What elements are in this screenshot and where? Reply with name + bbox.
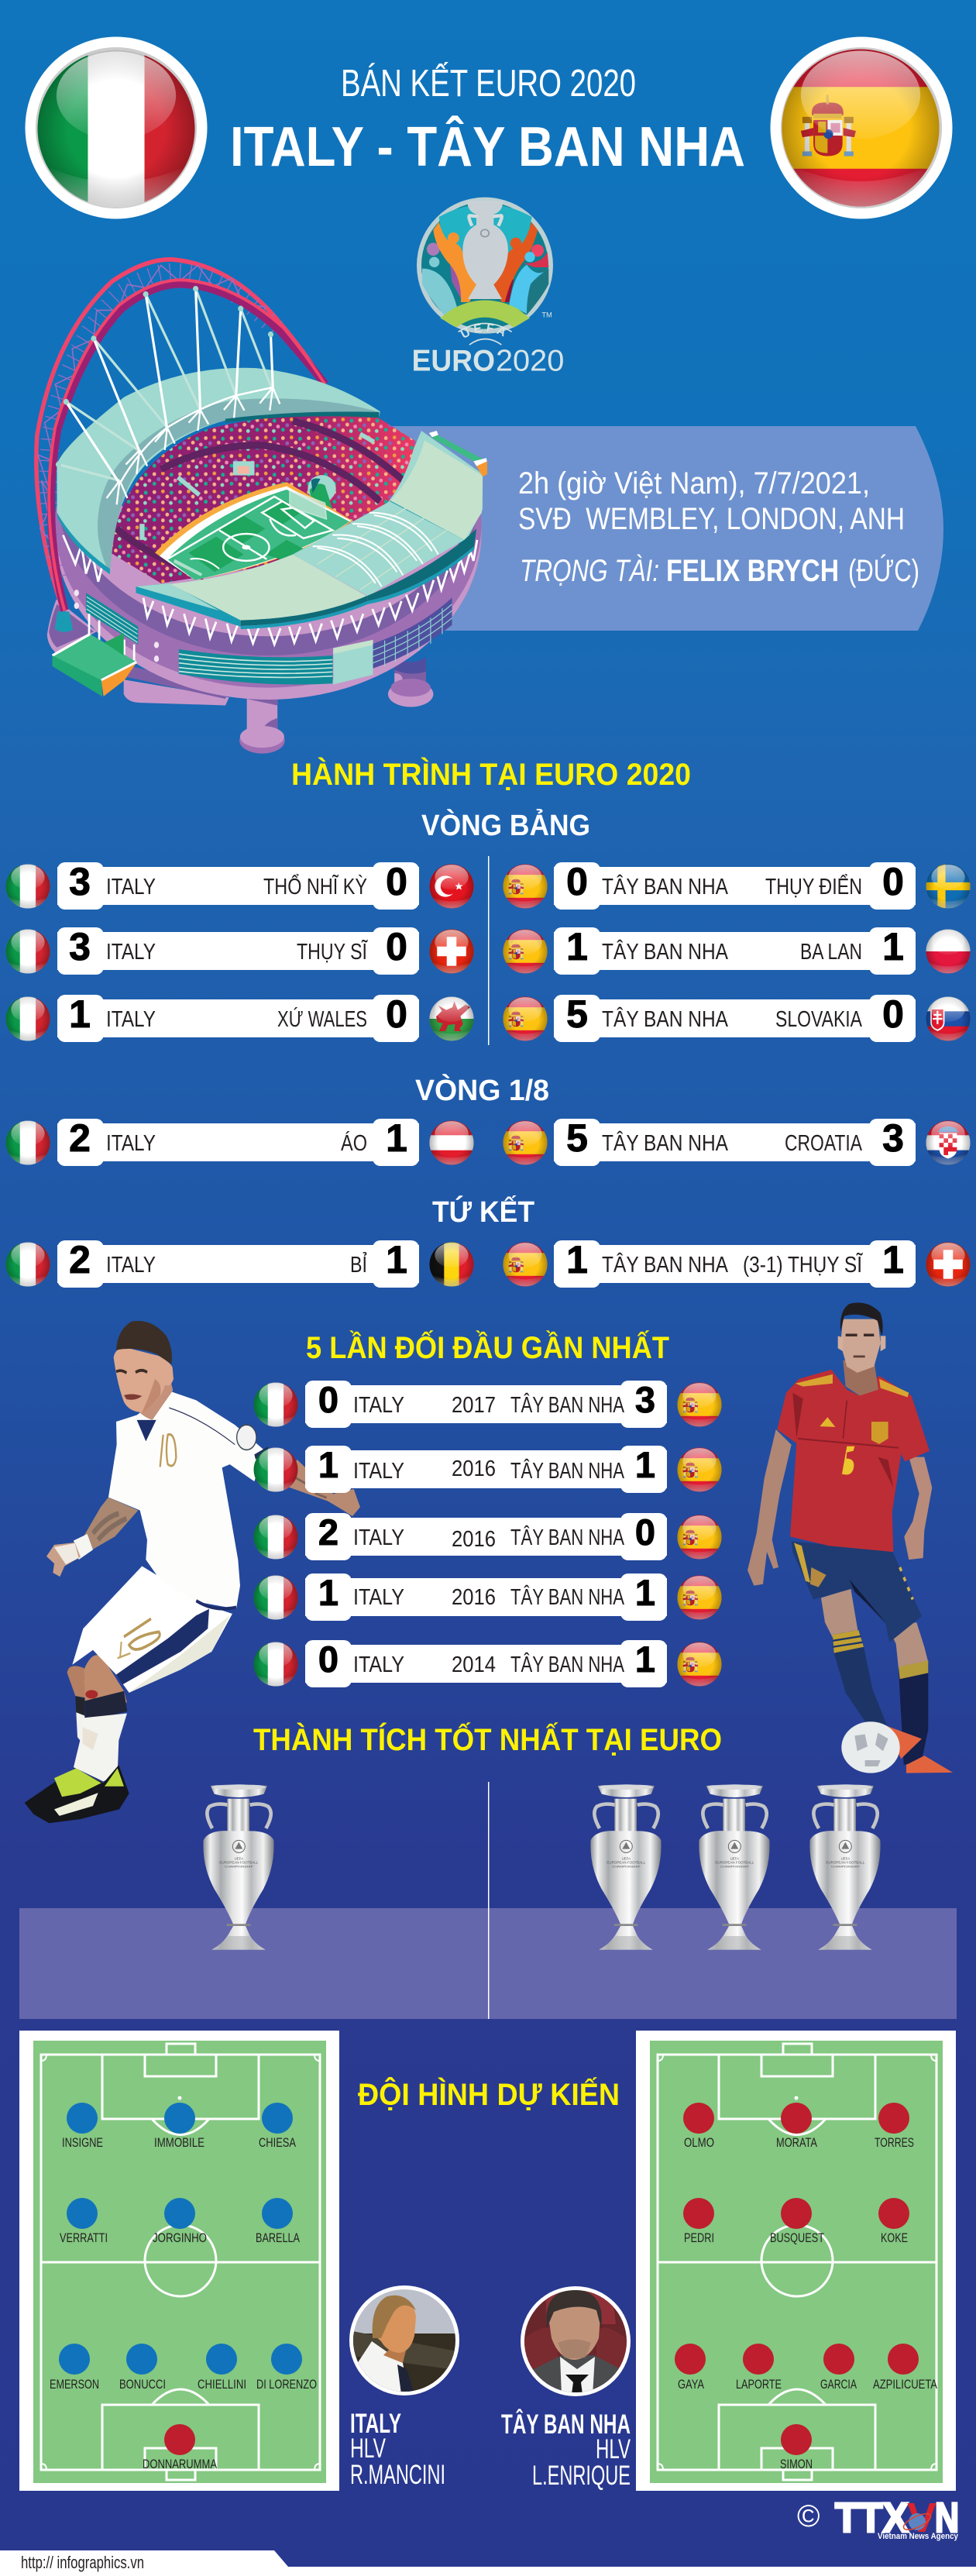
match time: 2h (giờ Việt Nam), 7/7/2021, [518, 466, 870, 500]
lineup pitch: Italy: EMERSON [50, 2377, 99, 2392]
match: Spain 1-1 Switzerland (3-1) [503, 1238, 970, 1288]
lineup pitch: Spain: TORRES [875, 2135, 914, 2150]
lineup pitch: Italy: DI LORENZO [256, 2377, 317, 2392]
match: Spain 5-3 Croatia: CROATIA [785, 1131, 863, 1156]
match: Italy 3-0 Turkey: 0 [386, 860, 407, 903]
match: Italy 2-1 Austria: ÁO [341, 1130, 367, 1156]
lineup pitch: Italy: CHIELLINI [198, 2377, 246, 2392]
match: Spain 5-0 Slovakia: 5 [566, 992, 588, 1036]
match: Italy 3-0 Switzerland: THỤY SĨ [297, 938, 369, 965]
match: Spain 5-0 Slovakia: SLOVAKIA [775, 1007, 863, 1032]
coach caption: Spain [501, 2409, 631, 2491]
heading: journey: HÀNH TRÌNH TẠI EURO 2020 [291, 757, 691, 792]
match: Spain 1-1 Switzerland (3-1): 1 [882, 1238, 904, 1281]
logo: TTXVN: N [935, 2495, 959, 2541]
match: Italy 3-0 Switzerland: 0 [386, 925, 407, 968]
main title: ITALY - TÂY BAN NHA [230, 115, 745, 178]
match: Italy 1-0 Wales: 0 [386, 992, 407, 1036]
heading: round of 16: VÒNG 1/8 [415, 1073, 549, 1107]
match: Italy 3-0 Turkey: ITALY [106, 875, 156, 899]
match: Italy 3-0 Turkey: 3 [69, 860, 91, 903]
match: Italy 3-0 Turkey [6, 860, 474, 910]
lineup pitch: Italy: INSIGNE [62, 2135, 103, 2150]
info pill [386, 426, 943, 631]
stadium illustration [36, 260, 487, 754]
match: Spain 0-0 Sweden: TÂY BAN NHA [602, 874, 729, 899]
lineup pitch: Italy: BARELLA [256, 2230, 300, 2245]
match: Italy 2-1 Belgium [6, 1238, 474, 1288]
match: Spain 1-1 Poland: BA LAN [800, 940, 862, 965]
referee: (ĐỨC) [848, 553, 919, 588]
lineup pitch: Italy: CHIESA [259, 2135, 296, 2150]
meeting 2014: 0 [318, 1639, 339, 1680]
match: Italy 3-0 Switzerland: ITALY [106, 940, 156, 965]
meeting 2017 [254, 1379, 722, 1428]
meeting 2017: 2017 [452, 1393, 496, 1418]
meeting 2014 [254, 1639, 722, 1687]
lineup pitch: Spain: BUSQUEST [770, 2230, 824, 2245]
match: Spain 5-3 Croatia [503, 1116, 970, 1166]
coach caption: Italy [350, 2409, 445, 2490]
heading: best Euro achievement: THÀNH TÍCH TỐT NHẤT TẠI EURO [253, 1721, 722, 1757]
referee: TRỌNG TÀI: [520, 553, 659, 588]
lineup pitch: Spain: GAYA [678, 2377, 705, 2392]
lineup pitch: Italy: JORGINHO [153, 2230, 207, 2245]
logo: UEFA Euro 2020: TM [541, 311, 552, 318]
lineup pitch: Spain: SIMON [780, 2457, 813, 2471]
match: Italy 2-1 Austria [6, 1116, 474, 1166]
match: Italy 1-0 Wales [6, 992, 474, 1042]
coach caption: Spain: TÂY BAN NHA [501, 2409, 631, 2440]
lineup pitch: Spain: GARCIA [820, 2377, 857, 2392]
coach photo: Mancini [349, 2285, 461, 2398]
match: Spain 1-1 Poland: 1 [566, 925, 588, 968]
match: Italy 1-0 Wales: 1 [69, 992, 91, 1036]
copyright mark: © [797, 2499, 820, 2533]
meeting 2016 first: ITALY [353, 1459, 404, 1484]
meeting 2014: 2014 [452, 1653, 496, 1677]
meeting 2016 third: 1 [635, 1572, 655, 1613]
lineup pitch: Spain: KOKE [881, 2230, 908, 2245]
match: Spain 1-1 Poland: TÂY BAN NHA [602, 939, 729, 965]
match: Italy 3-0 Switzerland [6, 925, 474, 975]
meeting 2017: ITALY [353, 1393, 404, 1418]
meeting 2016 second [254, 1512, 722, 1560]
meeting 2016 second: 2 [318, 1512, 339, 1553]
meeting 2016 first [254, 1444, 722, 1493]
lineup pitch: Spain: OLMO [684, 2135, 714, 2150]
heading: quarter-finals: TỨ KẾT [432, 1195, 534, 1229]
player: Spain no. 5 in red kit [747, 1302, 953, 1773]
logo: UEFA Euro 2020 [412, 197, 564, 378]
logo: TTXVN: TTX [835, 2495, 909, 2541]
logo: UEFA Euro 2020: UEFA [460, 324, 504, 338]
match: Spain 5-3 Croatia: TÂY BAN NHA [602, 1130, 729, 1156]
meeting 2016 first: 1 [318, 1444, 339, 1485]
meeting 2016 third: TÂY BAN NHA [510, 1584, 624, 1610]
heading: group stage: VÒNG BẢNG [421, 808, 590, 842]
heading: expected lineups: ĐỘI HÌNH DỰ KIẾN [358, 2076, 620, 2112]
meeting 2016 third: ITALY [353, 1585, 404, 1610]
footer strip with URL: http:// infographics.vn [21, 2553, 144, 2572]
match: Spain 1-1 Switzerland (3-1): 1 [566, 1238, 588, 1281]
match: Italy 2-1 Austria: 1 [386, 1116, 407, 1160]
match: Spain 1-1 Poland: 1 [882, 925, 904, 968]
lineup pitch: Italy: VERRATTI [60, 2230, 108, 2245]
meeting 2016 first: TÂY BAN NHA [510, 1458, 624, 1484]
match: Italy 2-1 Austria: 2 [69, 1116, 91, 1160]
match: Spain 0-0 Sweden [503, 860, 970, 910]
match: Italy 2-1 Belgium: BỈ [350, 1251, 367, 1278]
flag: Spain large [770, 37, 953, 218]
match: Spain 5-3 Croatia: 3 [882, 1116, 904, 1160]
meeting 2016 third [254, 1572, 722, 1621]
match: Italy 2-1 Belgium: ITALY [106, 1253, 156, 1278]
meeting 2017: 0 [318, 1379, 339, 1420]
meeting 2016 third: 1 [318, 1572, 339, 1613]
meeting 2016 third: 2016 [452, 1585, 496, 1610]
lineup pitch: Italy: DONNARUMMA [143, 2457, 218, 2471]
logo: TTXVN: V [907, 2495, 936, 2541]
match: Spain 0-0 Sweden: 0 [566, 860, 588, 903]
trophy shelf panel [19, 1908, 957, 2019]
meeting 2016 first: 1 [635, 1444, 655, 1485]
logo: UEFA Euro 2020: 2020 [496, 344, 564, 378]
lineup pitch: Spain: PEDRI [684, 2230, 714, 2245]
meeting 2017: TÂY BAN NHA [510, 1392, 624, 1418]
match: Italy 3-0 Switzerland: 3 [69, 925, 91, 968]
match: Italy 2-1 Belgium: 1 [386, 1238, 407, 1281]
lineup pitch: Italy: IMMOBILE [154, 2135, 204, 2150]
match: Spain 1-1 Switzerland (3-1): TÂY BAN NHA [602, 1252, 729, 1278]
meeting 2014: TÂY BAN NHA [510, 1652, 624, 1677]
coach caption: Spain: L.ENRIQUE [532, 2461, 631, 2491]
coach caption: Italy: HLV [350, 2433, 386, 2464]
match: Spain 0-0 Sweden: THỤY ĐIỂN [765, 873, 862, 899]
meeting 2016 second: TÂY BAN NHA [510, 1525, 624, 1550]
match: Italy 2-1 Austria: ITALY [106, 1131, 156, 1156]
match: Italy 1-0 Wales: ITALY [106, 1007, 156, 1032]
match: Italy 1-0 Wales: XỨ WALES [277, 1006, 367, 1032]
flag: Italy large [25, 37, 208, 218]
referee [520, 553, 919, 588]
group stage divider [488, 856, 490, 1045]
logo: TTXVN: Vietnam News Agency [878, 2532, 959, 2541]
heading: last 5 meetings: 5 LẦN ĐỐI ĐẦU GẦN NHẤT [306, 1329, 669, 1365]
referee: FELIX BRYCH [666, 554, 839, 588]
coach caption: Italy: R.MANCINI [350, 2460, 445, 2490]
match: Spain 0-0 Sweden: 0 [882, 860, 904, 903]
subtitle: BÁN KẾT EURO 2020 [341, 63, 636, 105]
trophy: Italy [203, 1784, 274, 1950]
match: Spain 5-0 Slovakia: TÂY BAN NHA [602, 1006, 729, 1032]
lineup pitch: Spain: AZPILICUETA [873, 2377, 937, 2392]
venue: SVĐ WEMBLEY, LONDON, ANH [518, 502, 905, 536]
meeting 2014: ITALY [353, 1653, 404, 1677]
meeting 2017: 3 [635, 1379, 655, 1420]
meeting 2014: 1 [635, 1639, 655, 1680]
trophies: Spain [590, 1784, 881, 1950]
player: Italy no. 10 in white kit [25, 1321, 360, 1823]
coach caption: Italy: ITALY [350, 2409, 401, 2439]
achievements divider [488, 1782, 490, 2019]
match: Italy 3-0 Turkey: THỔ NHĨ KỲ [263, 873, 367, 899]
coach caption: Spain: HLV [596, 2434, 631, 2464]
lineup pitch: Spain [636, 2031, 956, 2491]
match: Spain 5-3 Croatia: 5 [566, 1116, 588, 1160]
lineup pitch: Spain: MORATA [776, 2135, 817, 2150]
match: Spain 1-1 Switzerland (3-1): (3-1) THỤY SĨ [743, 1251, 864, 1278]
lineup pitch: Italy: BONUCCI [119, 2377, 166, 2392]
logo: TTXVN [835, 2495, 959, 2541]
logo: UEFA Euro 2020: EURO [412, 344, 495, 378]
match: Spain 1-1 Poland [503, 925, 970, 975]
meeting 2016 second: 0 [635, 1512, 655, 1553]
meeting 2016 second: 2016 [452, 1527, 496, 1552]
meeting 2016 first: 2016 [452, 1457, 496, 1481]
match: Italy 2-1 Belgium: 2 [69, 1238, 91, 1281]
coach photo: Enrique [521, 2286, 631, 2398]
lineup pitch: Italy [19, 2031, 339, 2491]
lineup pitch: Spain: LAPORTE [736, 2377, 782, 2392]
footer strip with URL [0, 2550, 976, 2576]
meeting 2016 second: ITALY [353, 1525, 404, 1550]
match: Spain 5-0 Slovakia [503, 992, 970, 1042]
match: Spain 5-0 Slovakia: 0 [882, 992, 904, 1036]
